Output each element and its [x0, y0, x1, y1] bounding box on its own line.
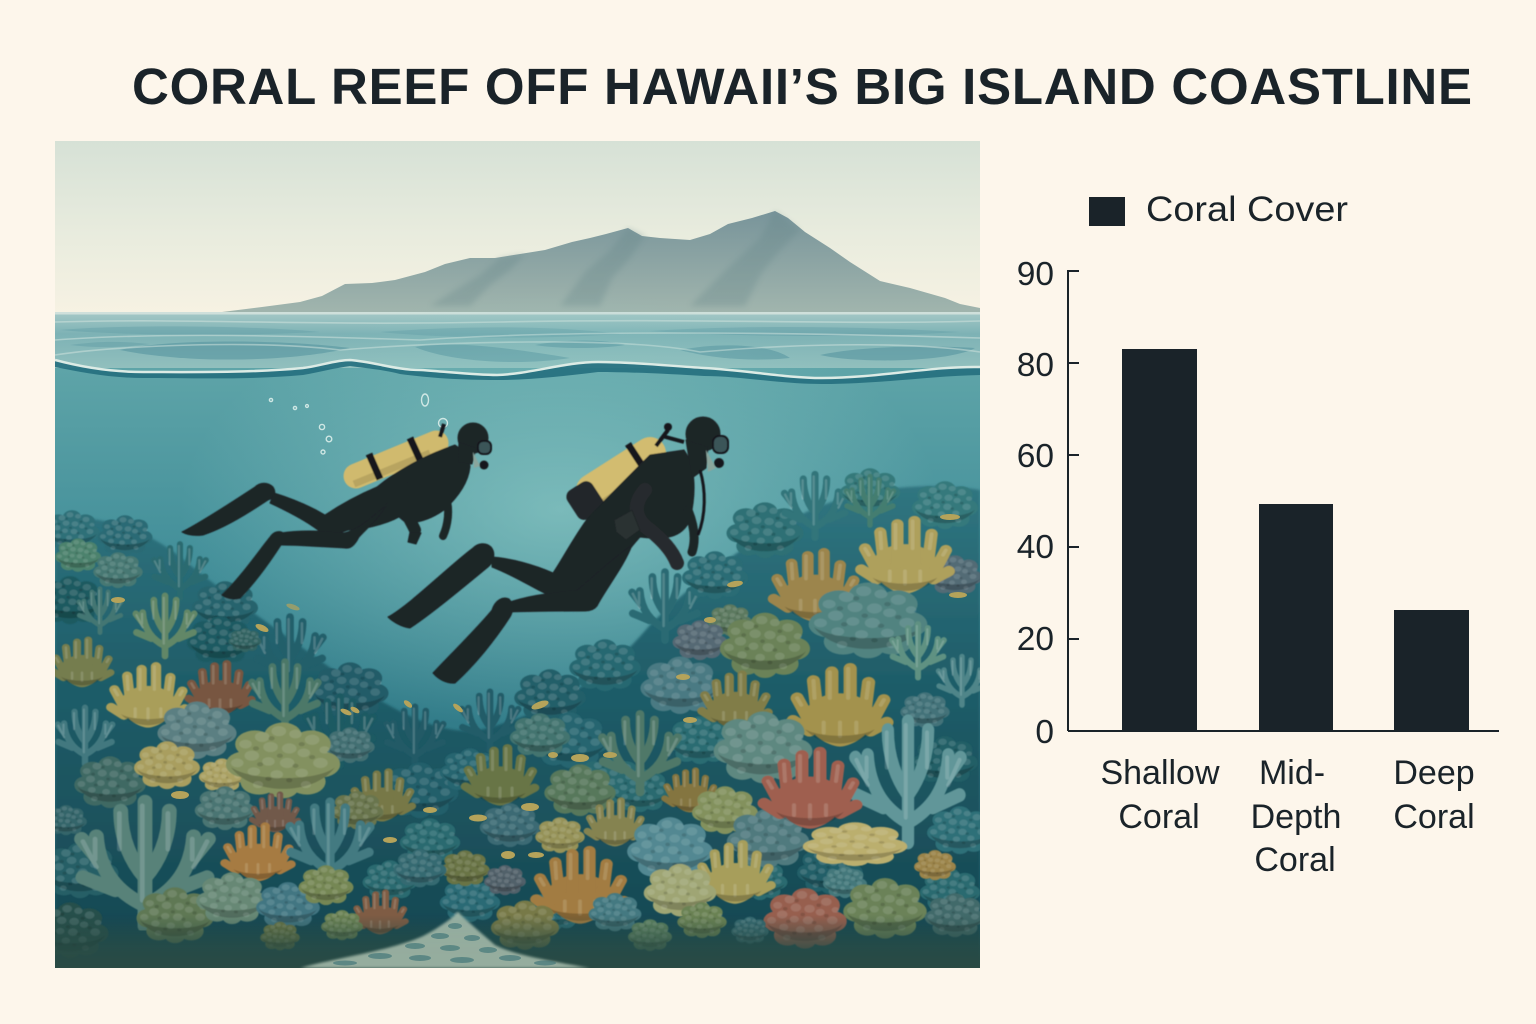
label: shallow coral: Coral: [1118, 798, 1200, 836]
mask and regulator: [698, 436, 728, 535]
y axis: 20: [1017, 621, 1054, 658]
fish: [111, 514, 967, 859]
label: mid-depth coral: Coral: [1254, 841, 1336, 879]
bar: shallow coral: [1122, 349, 1197, 731]
sea floor: [55, 915, 980, 968]
title: CORAL REEF OFF HAWAII’S BIG ISLAND COASTLINE: [132, 58, 1472, 115]
bar chart: [1017, 190, 1499, 879]
filler corals: [32, 576, 993, 958]
scuba tank: [354, 424, 444, 484]
wetsuit body: [182, 423, 488, 599]
label: mid-depth coral: Depth: [1251, 798, 1341, 836]
mask and regulator: [473, 441, 491, 470]
diver: left: [182, 423, 491, 599]
ocean surface: [55, 312, 980, 368]
bar: mid-depth coral: [1259, 504, 1333, 731]
label: deep coral: Deep: [1393, 754, 1475, 792]
label: mid-depth coral: Mid-: [1259, 754, 1325, 792]
island mountain: [222, 211, 980, 316]
panel: reef illustration: [32, 141, 993, 968]
y axis: 0: [1035, 714, 1054, 751]
waterline wave: [55, 360, 980, 384]
back reef mass: [55, 486, 980, 968]
coral: bottom row: [136, 865, 769, 951]
y axis: 40: [1017, 529, 1054, 566]
coral: right upper: [640, 476, 986, 747]
coral: right foreground: [536, 711, 985, 949]
sky: [55, 141, 980, 316]
coral: center: [394, 713, 809, 895]
label: deep coral: Coral: [1393, 798, 1475, 836]
bar: deep coral: [1394, 610, 1469, 731]
y axis: 60: [1017, 438, 1054, 475]
underwater gradient: [55, 368, 980, 968]
y axis: [1017, 256, 1079, 751]
sand path: [300, 912, 590, 968]
coral: upper left: [53, 538, 318, 808]
bubbles: [269, 394, 448, 454]
light glow: [242, 357, 862, 700]
background hazy corals: [44, 468, 978, 765]
y axis: 80: [1017, 347, 1054, 384]
x axis baseline: [1068, 730, 1499, 732]
diver: right: [388, 417, 728, 683]
coral: left middle: [45, 722, 412, 926]
legend: Coral Cover: [1146, 190, 1348, 229]
y axis: 90: [1017, 256, 1054, 293]
label: shallow coral: Shallow: [1100, 754, 1220, 792]
scuba tank: [563, 423, 684, 523]
wetsuit body: [388, 417, 720, 683]
